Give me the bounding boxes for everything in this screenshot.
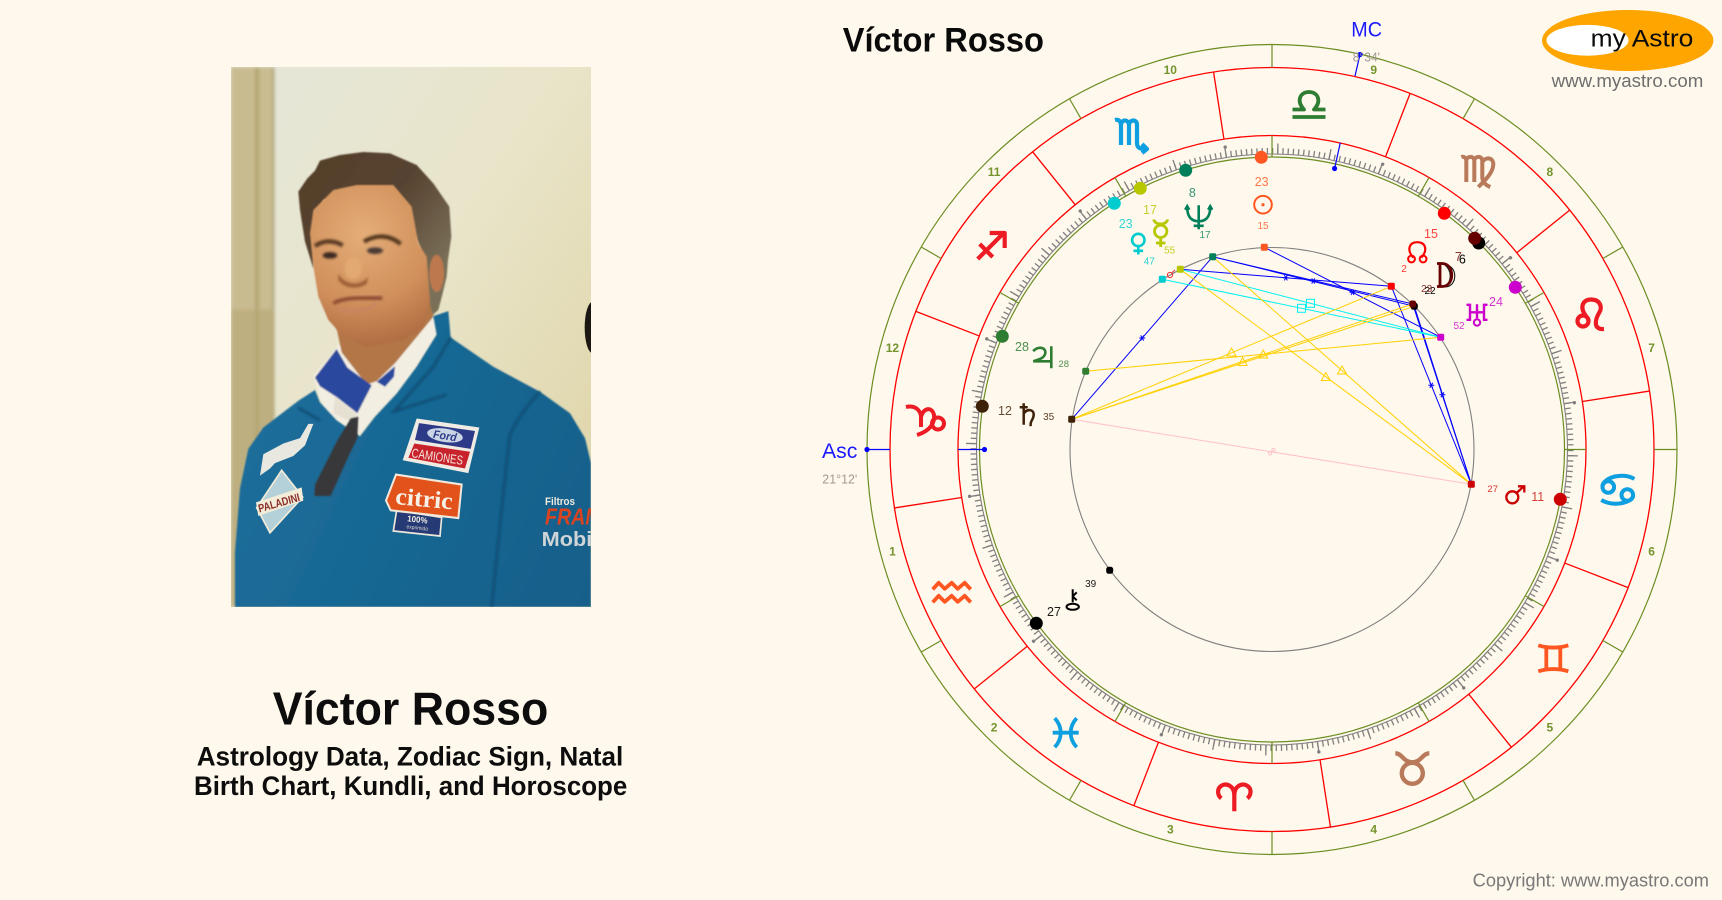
house numbers: 10 (1164, 63, 1177, 77)
Mars point (1468, 481, 1475, 488)
photo citric patch: citric (394, 483, 454, 516)
Chiron glyph and degrees: 39 (1085, 579, 1097, 590)
photo blue jacket (235, 311, 591, 607)
logo wordmark: my Astro (1591, 26, 1693, 53)
photo sleeve sponsor logos: Mobil (542, 528, 598, 551)
house numbers: 6 (1648, 544, 1655, 558)
subtitle line one: Astrology Data, Zodiac Sign, Natal (197, 742, 623, 772)
Lilith glyph and degrees: 22 (1424, 286, 1436, 297)
zodiac ring inner edge (958, 136, 1586, 764)
Mercury point (1177, 266, 1184, 273)
Uranus glyph and degrees: 24 (1489, 295, 1503, 309)
Mercury glyph and degrees (1143, 203, 1176, 256)
photo ear (429, 255, 444, 292)
midheaven label: MC (1351, 18, 1382, 42)
photo Paladini patch: PALADINI (257, 492, 301, 516)
copyright footer: Copyright: www.myastro.com (1473, 871, 1709, 891)
sign boundary dots (968, 145, 1576, 754)
trine aspects (gold) (1072, 257, 1471, 484)
Chiron point (1106, 567, 1113, 574)
photo sunglasses hanging from collar (314, 417, 358, 496)
Moon glyph and degrees (1421, 250, 1462, 295)
Moon glyph and degrees: 7 (1455, 250, 1462, 264)
Sun marker (1255, 151, 1268, 164)
zodiac ring outer edge (890, 68, 1654, 832)
outer wheel ring (867, 44, 1677, 854)
logo white ellipse (1546, 25, 1628, 56)
Jupiter glyph and degrees (1015, 340, 1069, 370)
Venus glyph and degrees: 23 (1119, 217, 1133, 231)
North Node glyph and degrees (1401, 227, 1438, 275)
photo stone pillar (231, 67, 274, 607)
photo sleeve sponsor logos: FRAM (545, 504, 602, 530)
photo wall background (231, 67, 591, 607)
Chiron glyph and degrees: 27 (1047, 605, 1061, 619)
photo body layers (231, 67, 602, 607)
Moon glyph and degrees: 23 (1421, 284, 1433, 295)
house numbers: 3 (1167, 822, 1174, 836)
North Node glyph and degrees: 2 (1401, 264, 1407, 275)
photo citric patch: 100% (407, 514, 429, 526)
degree ticks (971, 149, 1573, 750)
Neptune glyph and degrees: 17 (1199, 230, 1211, 241)
Saturn glyph and degrees: 35 (1043, 412, 1055, 423)
photo Ford Camiones patch: Ford (432, 429, 458, 444)
photo Ford Camiones patch: CAMIONES (411, 446, 464, 468)
house numbers: 8 (1547, 165, 1554, 179)
photo face (310, 185, 430, 347)
icon: Taurus (1395, 753, 1429, 784)
photo Ford Camiones patch (403, 419, 479, 473)
square aspects (cyan) (1162, 269, 1441, 337)
icon: Leo (1578, 300, 1604, 329)
Lilith point (1411, 303, 1418, 310)
logo web address: www.myastro.com (1551, 71, 1703, 91)
Jupiter point (1082, 368, 1089, 375)
photo sleeve sponsor logos: Filtros (545, 497, 575, 508)
icon: Pisces (1053, 718, 1079, 747)
photo sleeve sponsor logos (543, 497, 591, 546)
house numbers (886, 63, 1655, 836)
inner house ring (980, 157, 1564, 742)
photo Paladini patch (256, 470, 303, 533)
natal chart wheel (864, 44, 1677, 854)
North Node point (1388, 283, 1395, 290)
Jupiter glyph and degrees: 28 (1058, 359, 1069, 370)
icon: Aquarius (933, 583, 971, 602)
Mars glyph and degrees (1487, 484, 1544, 504)
Chiron glyph and degrees (1047, 579, 1097, 619)
Saturn marker (976, 400, 989, 413)
subtitle block (194, 742, 627, 801)
icon: Libra (1292, 92, 1326, 117)
photo head (298, 152, 451, 347)
aspect circle (1070, 248, 1474, 652)
logo orange ellipse (1542, 10, 1713, 71)
Uranus glyph and degrees: 52 (1453, 321, 1465, 332)
house numbers: 2 (991, 721, 998, 735)
Uranus point (1437, 334, 1444, 341)
Venus point (1159, 276, 1166, 283)
Sun glyph and degrees: 23 (1255, 175, 1269, 189)
Mars glyph and degrees: 11 (1531, 490, 1544, 504)
Mercury glyph and degrees: 17 (1143, 203, 1157, 217)
midheaven axis markers (1332, 52, 1363, 171)
ascendant label: Asc (822, 440, 857, 463)
logo: myAstro (1542, 10, 1713, 91)
Jupiter marker (996, 330, 1009, 343)
icon: Sagittarius (978, 233, 1005, 259)
Saturn glyph and degrees: 12 (998, 404, 1012, 418)
photo citric patch: exprimido (406, 524, 428, 533)
photo white jacket emblem (260, 424, 313, 476)
house numbers: 7 (1648, 341, 1655, 355)
Sun glyph and degrees: 15 (1257, 221, 1269, 232)
sextile aspects (blue) (1072, 247, 1471, 484)
conjunction mark (red) (1167, 270, 1175, 278)
Moon point (1409, 300, 1416, 308)
house cusp lines (921, 44, 1677, 854)
house numbers: 1 (889, 544, 896, 558)
North Node glyph and degrees: 15 (1424, 227, 1438, 241)
Sun point (1261, 244, 1268, 251)
Saturn glyph and degrees (998, 403, 1055, 426)
Neptune marker (1179, 164, 1192, 177)
Neptune glyph and degrees (1185, 186, 1212, 241)
photo citric patch (386, 475, 462, 536)
subtitle line two: Birth Chart, Kundli, and Horoscope (194, 771, 627, 801)
house numbers: 4 (1370, 822, 1377, 836)
photo hair (298, 152, 451, 315)
Neptune point (1209, 253, 1216, 260)
icon: Capricorn (906, 407, 944, 435)
Moon marker (1468, 232, 1481, 245)
Neptune glyph and degrees: 8 (1189, 186, 1196, 200)
planet markers on the inner green ring (976, 151, 1567, 630)
photo: portrait of Víctor Rosso (231, 67, 602, 607)
midheaven degree: 8°34' (1353, 50, 1380, 65)
Mercury marker (1134, 182, 1147, 195)
aspect lines (1072, 247, 1471, 484)
Saturn point (1068, 416, 1075, 423)
Lilith glyph and degrees (1424, 253, 1466, 297)
Uranus marker (1509, 281, 1522, 294)
house numbers: 9 (1370, 63, 1377, 77)
photo jacket folds (298, 338, 540, 607)
icon: Cancer (1601, 476, 1634, 504)
ascendant axis markers (864, 447, 987, 452)
icon: Aries (1218, 785, 1251, 811)
ascendant degree: 21°12' (822, 471, 857, 486)
planet labels (998, 175, 1544, 619)
zodiac sign glyphs (906, 92, 1634, 811)
Lilith marker (1472, 236, 1485, 250)
icon: Scorpio (1115, 120, 1147, 153)
house numbers: 11 (988, 165, 1001, 179)
Uranus glyph and degrees (1453, 295, 1503, 332)
Mars marker (1554, 493, 1567, 506)
house numbers: 12 (886, 341, 899, 355)
North Node marker (1438, 207, 1451, 220)
Mercury glyph and degrees: 55 (1164, 245, 1176, 256)
Venus glyph and degrees: 47 (1144, 256, 1155, 267)
Lilith glyph and degrees: 6 (1459, 253, 1466, 267)
Mars glyph and degrees: 27 (1487, 484, 1498, 495)
house numbers: 5 (1547, 721, 1554, 735)
photo eyebrows and eyes (315, 237, 401, 259)
opposition aspect (pink) (1072, 419, 1471, 484)
Sun glyph and degrees (1254, 175, 1272, 232)
photo dark object at right edge (584, 302, 591, 353)
degree scale ring (976, 154, 1568, 745)
chart title: Víctor Rosso (843, 22, 1044, 60)
main heading: name under photo: Víctor Rosso (273, 682, 548, 734)
sign boundary lines (894, 72, 1650, 827)
photo mouth (333, 298, 382, 311)
photo shirt and neck (314, 300, 436, 434)
Venus marker (1108, 197, 1121, 210)
icon: Gemini (1538, 645, 1568, 671)
Chiron marker (1030, 617, 1043, 630)
Jupiter glyph and degrees: 28 (1015, 340, 1029, 354)
icon: Virgo (1461, 157, 1493, 187)
photo nose (338, 258, 368, 288)
planet points on the aspect circle (1068, 244, 1475, 574)
Venus glyph and degrees (1119, 217, 1155, 267)
